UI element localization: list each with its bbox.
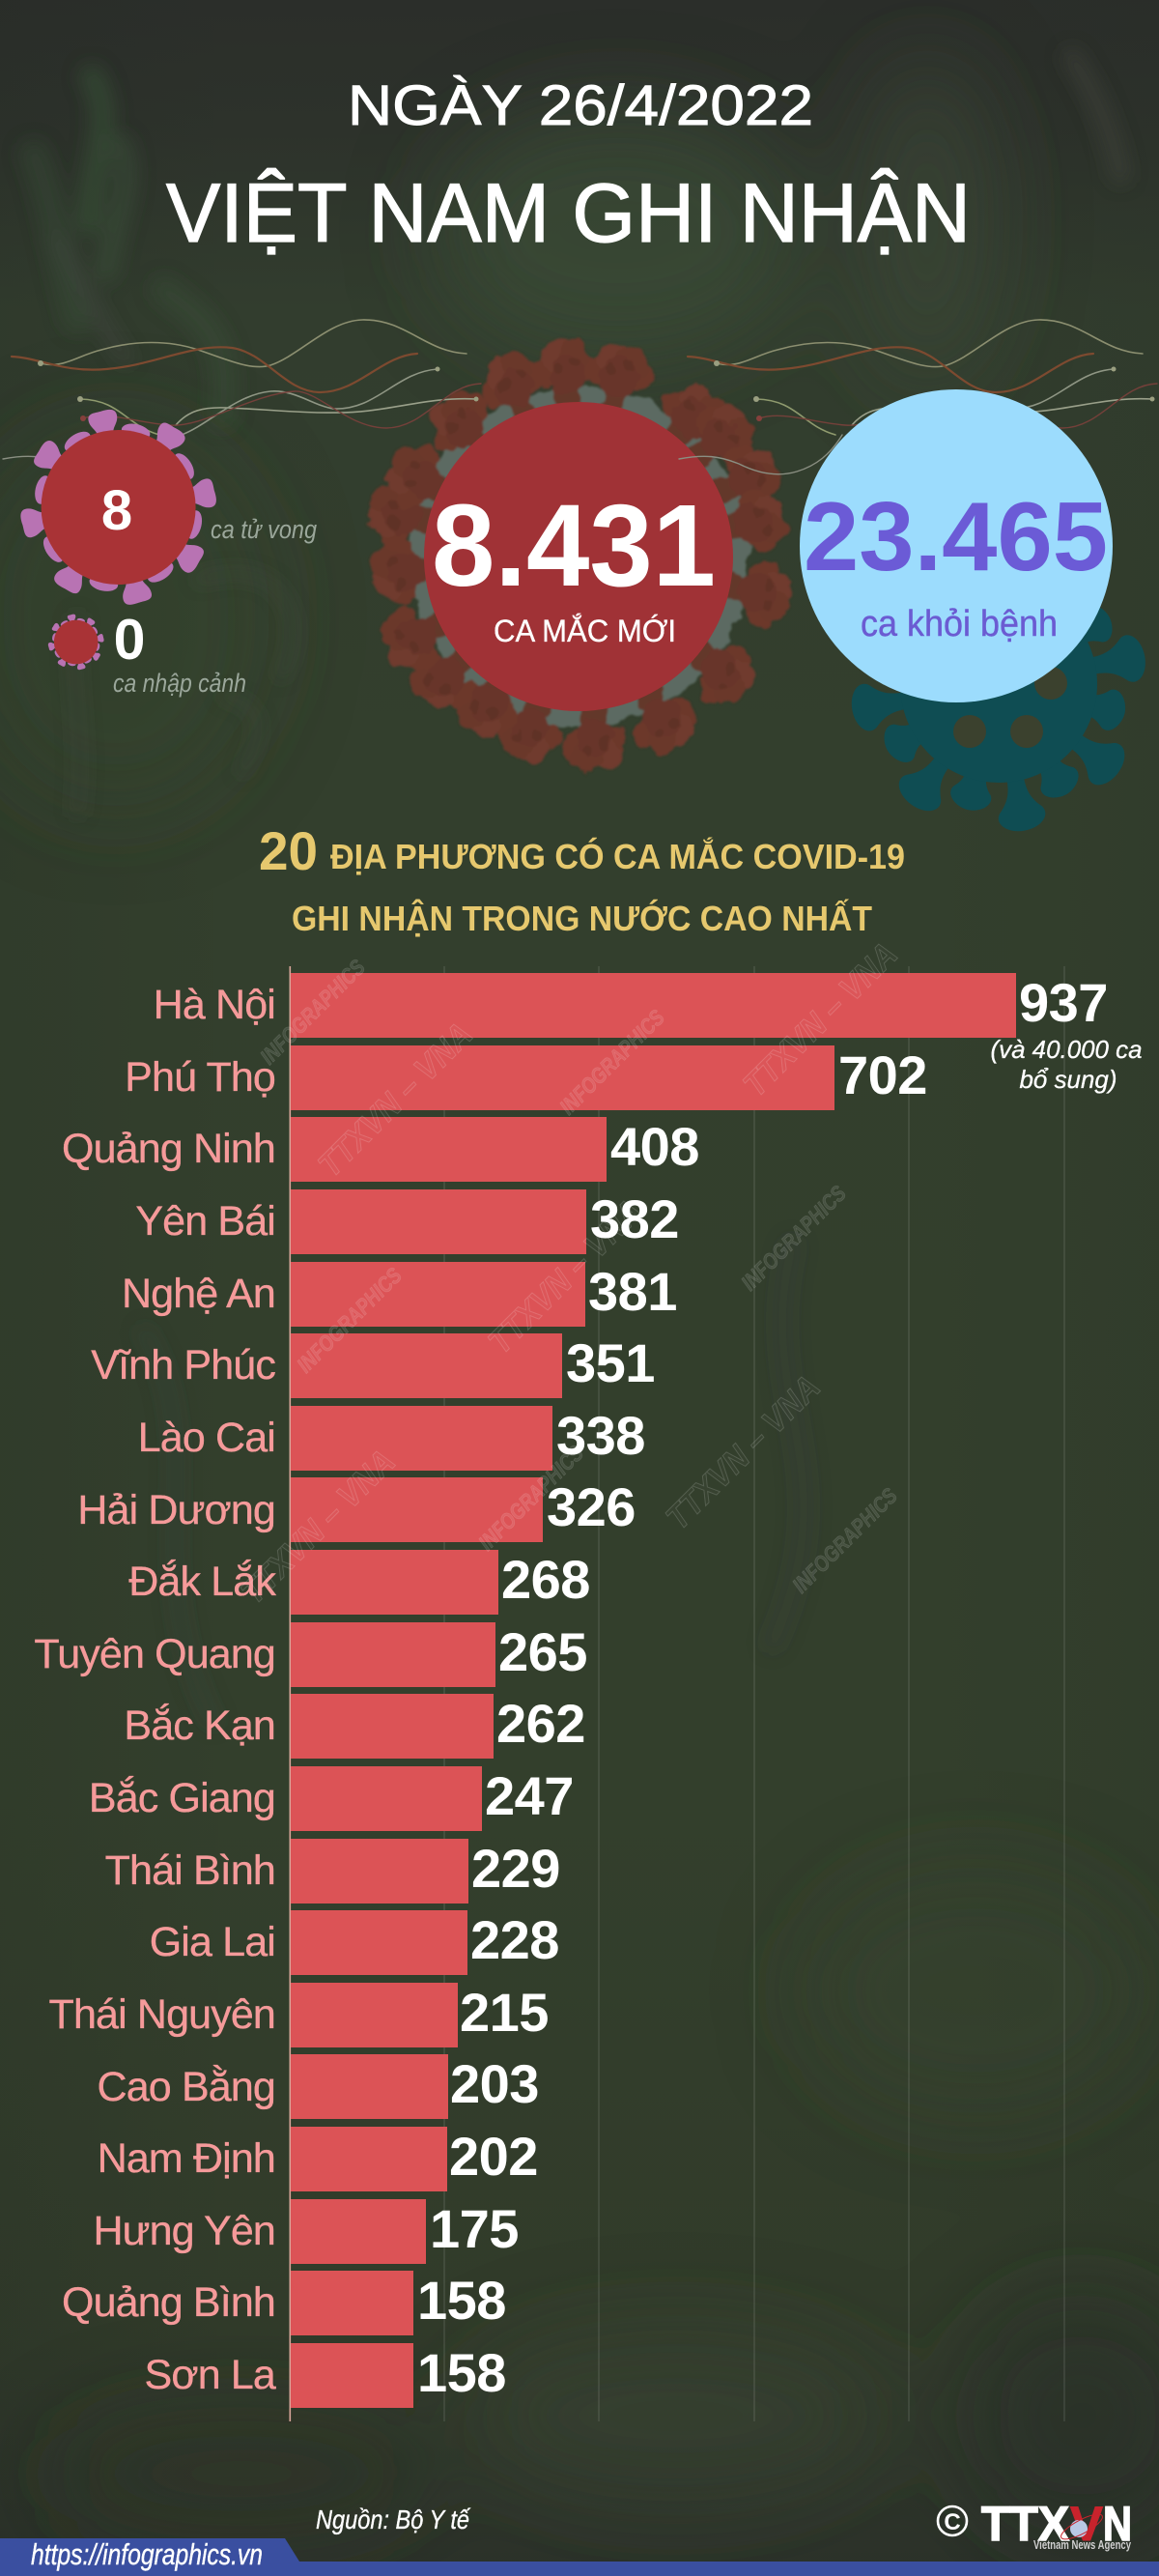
bar: Đắk Lắk: 268	[501, 1549, 590, 1610]
caption: new cases: CA MẮC MỚI	[494, 614, 676, 648]
bar: Hưng Yên: Hưng Yên	[93, 2208, 275, 2254]
bar chart	[34, 966, 1142, 2421]
bar: Gia Lai	[150, 1909, 559, 1975]
bar: Bắc Giang: Bắc Giang	[89, 1775, 275, 1821]
bar: Cao Bằng	[98, 2053, 539, 2119]
bar: Hà Nội: Hà Nội	[154, 982, 275, 1028]
bar: Nghệ An: 381	[588, 1261, 677, 1322]
bar: Tuyên Quang: Tuyên Quang	[34, 1631, 275, 1677]
number of imported cases: 0	[114, 608, 145, 672]
bar: Đắk Lắk: Đắk Lắk	[128, 1559, 276, 1605]
bar: Bắc Giang: 247	[485, 1765, 574, 1826]
bar: Hải Dương: 326	[547, 1476, 636, 1537]
bar: Quảng Bình: Quảng Bình	[62, 2279, 275, 2326]
caption: recovered: ca khỏi bệnh	[861, 604, 1058, 644]
circle: recovered	[800, 389, 1113, 702]
bar: Thái Nguyên: 215	[460, 1982, 549, 2043]
bar: Lào Cai	[138, 1405, 645, 1471]
bar: Nghệ An	[122, 1261, 677, 1327]
bar: Gia Lai: Gia Lai	[150, 1919, 275, 1965]
bar: Quảng Bình	[62, 2270, 506, 2335]
decorative waves left	[3, 320, 481, 474]
bar: Yên Bái: 382	[590, 1188, 679, 1249]
heading: date line: NGÀY 26/4/2022	[348, 74, 813, 137]
caption: deaths: ca tử vong	[211, 515, 317, 544]
bar: Sơn La: 158	[417, 2342, 506, 2403]
bar: Yên Bái	[135, 1188, 679, 1254]
bar: Nghệ An: Nghệ An	[122, 1271, 275, 1317]
logo: TTXVN: TTX	[981, 2497, 1069, 2551]
bar: Bắc Kạn	[124, 1693, 585, 1759]
logo: TTXVN: N	[1103, 2497, 1132, 2551]
bar: Vĩnh Phúc: Vĩnh Phúc	[91, 1342, 275, 1388]
bar: Phú Thọ: Phú Thọ	[125, 1054, 275, 1101]
bar: Hà Nội	[154, 972, 1142, 1094]
heading: chart title	[259, 820, 905, 938]
bar: Thái Bình: 229	[471, 1838, 560, 1899]
bar: Bắc Kạn: 262	[496, 1693, 585, 1754]
source note: Nguồn: Bộ Y tế	[316, 2504, 471, 2534]
panel: imported cases	[47, 608, 246, 698]
heading: chart title: 20	[259, 820, 318, 881]
bar: Tuyên Quang	[34, 1621, 587, 1687]
bar: Hưng Yên	[93, 2198, 519, 2264]
bar: Thái Nguyên: Thái Nguyên	[49, 1991, 275, 2038]
bar: Nam Định	[98, 2126, 538, 2191]
bar: Phú Thọ: 702	[838, 1045, 927, 1105]
circle: new cases	[424, 402, 733, 711]
number: new cases: 8.431	[432, 479, 716, 611]
bar: Thái Bình	[105, 1838, 560, 1903]
heading: chart title: ĐỊA PHƯƠNG CÓ CA MẮC COVID-19	[330, 836, 905, 876]
bar: Nam Định: 202	[449, 2126, 538, 2187]
bar: Quảng Ninh: Quảng Ninh	[62, 1126, 275, 1172]
footer bar with website	[0, 2537, 1159, 2576]
logo: TTXVN	[938, 2497, 1132, 2552]
bar: Hà Nội: (và 40.000 ca	[991, 1035, 1142, 1064]
bar: Lào Cai: Lào Cai	[138, 1415, 275, 1461]
icon: tiny virus	[47, 614, 104, 671]
bar: Cao Bằng: Cao Bằng	[98, 2064, 275, 2110]
bar: Bắc Kạn: Bắc Kạn	[124, 1703, 275, 1749]
number of deaths: 8	[101, 479, 132, 542]
bar: Vĩnh Phúc: 351	[566, 1332, 655, 1393]
heading: chart title: GHI NHẬN TRONG NƯỚC CAO NHẤT	[292, 898, 872, 938]
bar: Quảng Bình: 158	[417, 2270, 506, 2331]
bar: Nam Định: Nam Định	[98, 2135, 275, 2182]
logo: TTXVN: C	[944, 2509, 961, 2535]
logo: TTXVN: V	[1070, 2497, 1104, 2551]
bar: Yên Bái: Yên Bái	[135, 1198, 275, 1245]
bar: Hải Dương	[77, 1476, 636, 1542]
bar: Quảng Ninh	[62, 1116, 699, 1182]
bar: Hưng Yên: 175	[430, 2198, 519, 2259]
number: recovered: 23.465	[804, 483, 1108, 591]
bar: Đắk Lắk	[128, 1549, 590, 1615]
watermarks	[234, 935, 905, 1612]
bar: Thái Nguyên	[49, 1982, 549, 2047]
bar: Quảng Ninh: 408	[610, 1116, 699, 1177]
panel: new cases	[424, 402, 733, 711]
caption: imported: ca nhập cảnh	[113, 669, 246, 698]
icon: teal coronavirus behind recovered cases	[848, 586, 1149, 835]
panel: recovered	[800, 389, 1113, 702]
bar: Bắc Giang	[89, 1765, 574, 1831]
bar: Vĩnh Phúc	[91, 1332, 655, 1398]
panel: deaths	[19, 408, 317, 606]
website url: https://infographics.vn	[31, 2537, 263, 2571]
bar: Thái Bình: Thái Bình	[105, 1847, 275, 1894]
bar: Phú Thọ	[125, 1045, 927, 1110]
icon: brown coronavirus behind new cases	[362, 338, 798, 774]
bar: Gia Lai: 228	[470, 1909, 559, 1970]
bar: Tuyên Quang: 265	[498, 1621, 587, 1682]
bar: Sơn La	[145, 2342, 506, 2408]
bar: Hà Nội: 937	[1019, 972, 1108, 1033]
bar: Hà Nội: bổ sung)	[1020, 1065, 1117, 1094]
heading: main title: VIỆT NAM GHI NHẬN	[166, 167, 971, 260]
bar: Lào Cai: 338	[556, 1405, 645, 1466]
decorative waves right	[679, 320, 1157, 474]
bar: Cao Bằng: 203	[450, 2053, 539, 2114]
icon: small virus with red body	[19, 408, 217, 606]
bar: Hải Dương: Hải Dương	[77, 1487, 275, 1533]
bar: Sơn La: Sơn La	[145, 2352, 276, 2398]
